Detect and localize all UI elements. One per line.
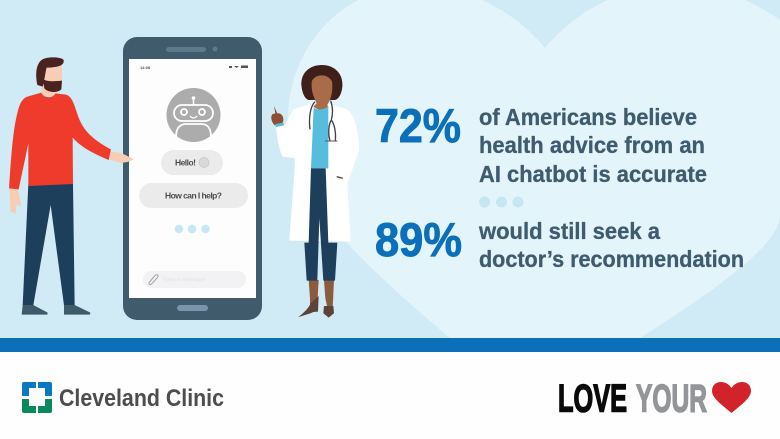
separator dots [479,196,524,208]
doctor hair [301,65,342,100]
doctor face [312,75,332,111]
stat 89 description: doctor’s recommendation [479,246,744,272]
logo wordmark: Cleveland Clinic [59,385,224,412]
doctor raised hand [271,106,283,125]
phone camera [212,46,218,52]
robot antenna [192,98,194,105]
man beard [43,78,62,92]
stat 89 percent: 89% [375,213,462,266]
doctor legs [309,280,334,313]
hello text: Hello! [175,158,196,168]
phone screen [129,59,256,298]
robot mouth [190,116,197,118]
your word: YOUR [636,378,707,420]
robot right eye [199,109,205,115]
man pointing hand [109,152,134,163]
background panel [0,0,780,338]
phone typing dots [175,225,210,233]
input placeholder: Type a message [163,277,205,283]
message input [143,271,246,288]
background heart [288,0,780,338]
logo cross mark [22,382,52,413]
love word: LOVE [558,378,627,420]
Cleveland Clinic logo [22,382,224,413]
phone home button [177,305,208,311]
status icons [229,66,248,68]
stat 72 description [479,104,707,187]
doctor shoes [298,296,334,318]
stat 72 percent: 72% [375,99,461,152]
stat 72 description: AI chatbot is accurate [479,161,707,187]
man left hand [9,189,21,214]
footer panel [0,352,780,439]
help bubble [139,183,248,208]
man hair [36,57,64,87]
phone speaker [166,47,206,52]
status time: 14:08 [140,65,151,70]
robot antenna tip [192,96,195,100]
illustration: man [9,57,134,315]
Love Your heart logo [558,378,751,420]
robot left eye [181,109,187,115]
stat 89 description: would still seek a [478,218,660,244]
robot avatar [166,88,220,142]
robot shoulders [176,124,211,137]
illustration: doctor [271,65,359,318]
doctor trousers [304,168,337,281]
robot head [174,105,213,121]
man shoes [22,305,90,315]
stethoscope [310,101,336,141]
stethoscope chest piece [325,139,337,142]
stat 72 description: health advice from an [479,132,705,158]
man sweater [9,93,111,189]
blue divider band [0,338,780,352]
man trousers [23,183,75,305]
hello bubble [161,150,223,175]
coat pocket [337,177,343,178]
avatar circle [166,88,220,142]
red heart [712,382,751,413]
doctor cuff [275,123,284,127]
help text: How can I help? [165,190,222,200]
paperclip icon [149,275,158,285]
doctor top [311,106,328,168]
phone body [123,37,262,320]
stat 89 description [478,218,744,272]
doctor coat [276,103,359,242]
hello emoji [199,158,209,168]
stat 72 description: of Americans believe [479,104,697,130]
man neck and face [41,66,62,96]
